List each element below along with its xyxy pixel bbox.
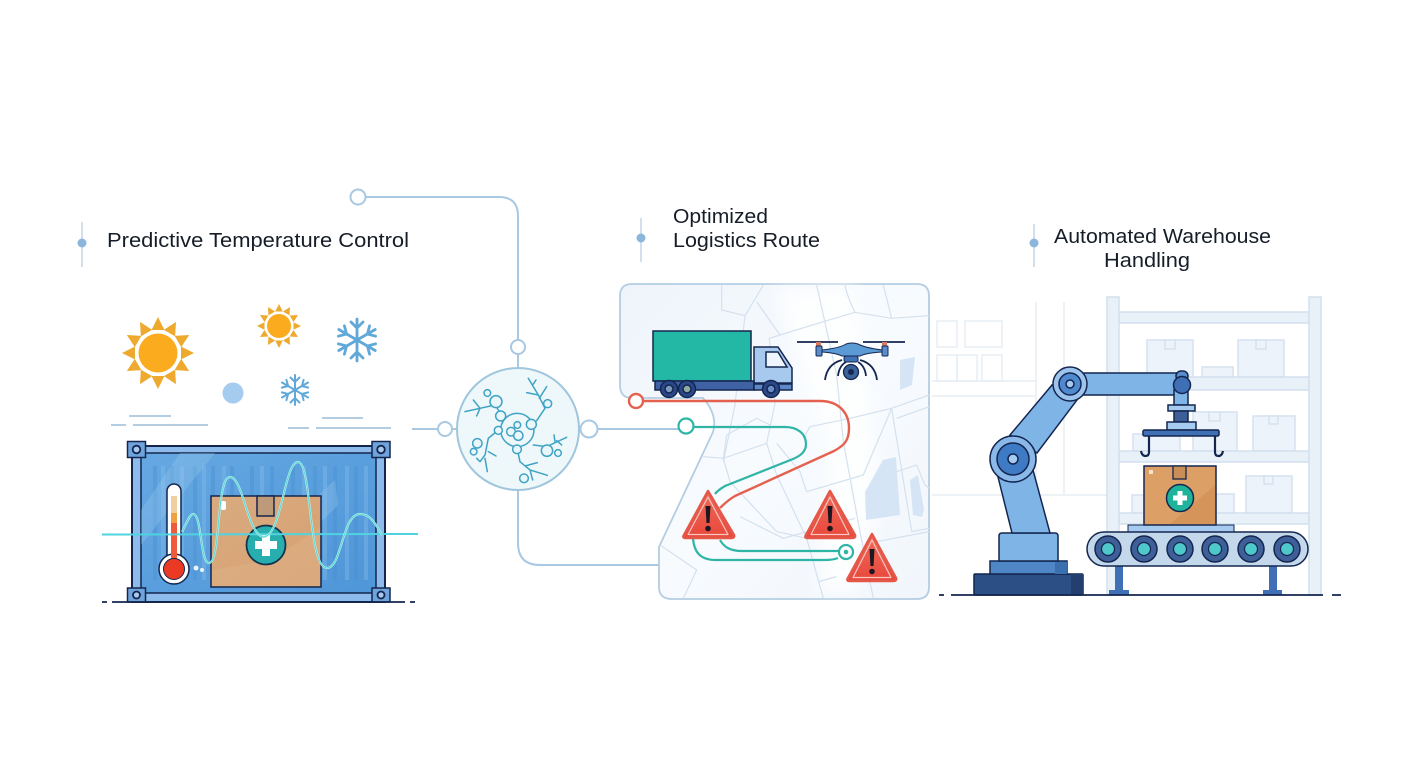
icon: large sun — [122, 317, 194, 389]
medical box — [211, 496, 321, 587]
route: red — [629, 394, 849, 508]
air flow dashes — [111, 416, 391, 428]
heading: automated warehouse handling: Automated Warehouse — [1054, 226, 1271, 248]
icon: small snowflake — [280, 375, 310, 405]
icon: warning triangle 1 — [683, 491, 734, 538]
ground line: warehouse — [939, 594, 1341, 596]
warehouse shelving — [1107, 297, 1321, 595]
heading: predictive temperature control: Predictive Temperature Control — [107, 230, 409, 252]
ground line: container — [102, 601, 415, 603]
icon: large snowflake — [336, 319, 378, 361]
panel: route map — [620, 284, 929, 599]
icon: warning triangle 2 — [805, 491, 855, 538]
drone — [797, 342, 905, 380]
thermometer — [159, 484, 204, 584]
heading: automated warehouse handling: Handling — [1104, 250, 1190, 272]
temperature signal wave — [102, 462, 418, 568]
map building blocks — [865, 357, 924, 520]
faded warehouse background — [932, 302, 1107, 495]
medical box on conveyor — [1144, 466, 1216, 525]
heading: optimized logistics route — [636, 206, 820, 262]
route: teal — [678, 418, 853, 560]
robot arm — [974, 367, 1180, 595]
heading: predictive temperature control — [78, 222, 409, 267]
icon: blue dot — [222, 382, 244, 404]
map streets — [660, 285, 929, 598]
shipping container — [128, 442, 390, 602]
robot gripper — [1141, 371, 1223, 456]
heading: optimized logistics route: Logistics Route — [673, 230, 820, 252]
central network hub icon — [457, 368, 579, 490]
connector lines and nodes — [350, 190, 679, 565]
icon: warning triangle 3 — [847, 534, 896, 581]
container corners — [128, 442, 390, 602]
icon: small sun — [257, 304, 301, 348]
truck — [653, 331, 792, 398]
heading: optimized logistics route: Optimized — [673, 206, 768, 228]
conveyor belt — [1087, 525, 1308, 595]
heading: automated warehouse handling — [1030, 224, 1271, 272]
